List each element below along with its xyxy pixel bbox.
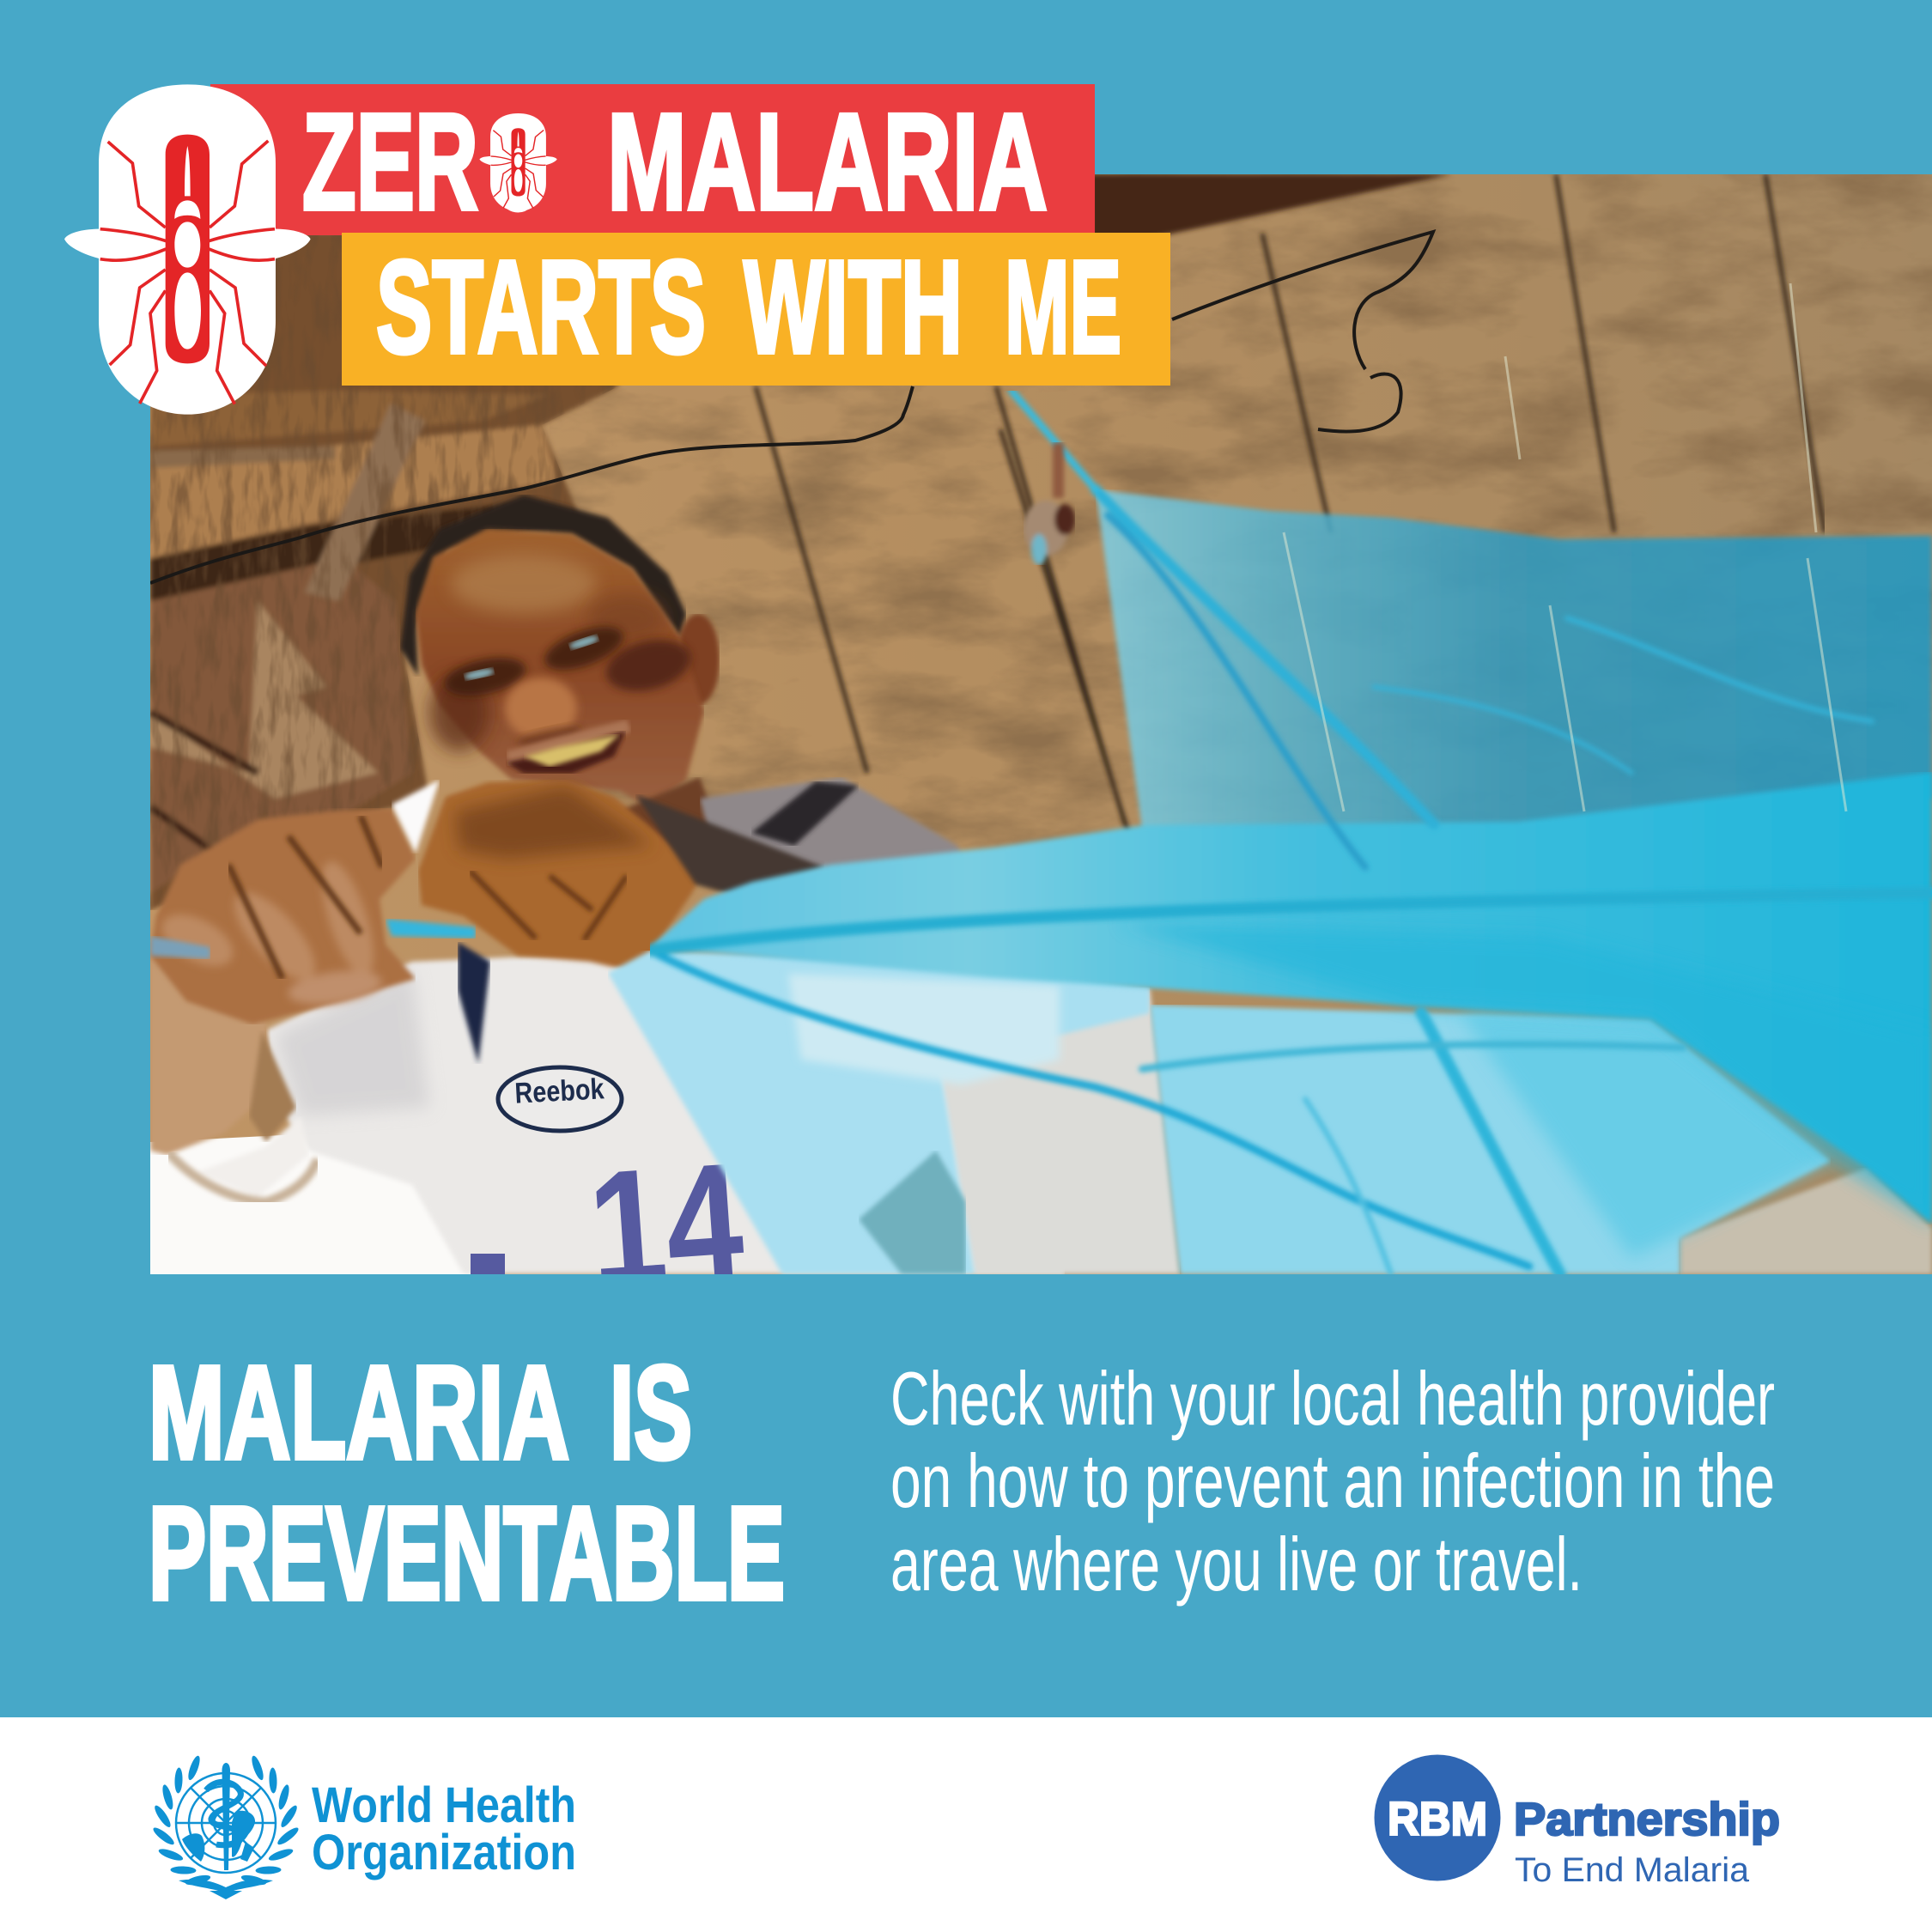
photo: lit palm leaves — [150, 601, 378, 799]
photo: background wall details — [150, 174, 1825, 910]
photo: bright sky at bottom left — [150, 1125, 481, 1274]
photo: straw texture on thatch — [150, 232, 683, 910]
photo: dark thatch shadow — [150, 502, 515, 601]
thumb — [286, 966, 384, 1009]
finger one — [154, 904, 241, 976]
emblem laurel leaves right — [240, 1754, 301, 1887]
photo: left cheek shadow — [429, 674, 489, 751]
photo: shirt reebok badge — [498, 1067, 622, 1131]
photo: eye socket left — [441, 651, 529, 702]
photo: second eye — [568, 634, 600, 651]
logo mosquito legs — [108, 141, 268, 404]
photo: thick lower hem — [650, 951, 1529, 1267]
photo: forearm shadow — [249, 1030, 296, 1142]
photo: bright gap between hands — [392, 780, 440, 854]
photo: shirt shoulder — [700, 777, 966, 884]
photo: man — [150, 495, 1065, 1274]
photo: nose — [505, 677, 577, 739]
photo: lower sheet strand — [1305, 1099, 1391, 1274]
photo: roof beam — [150, 447, 335, 468]
heading word: IS: IS — [610, 1339, 692, 1486]
photo: small shirt mark — [471, 1254, 505, 1279]
photo: cord to wall — [1012, 391, 1096, 489]
photo: nose shadow — [516, 723, 583, 750]
photo: wood grain texture — [550, 174, 1932, 887]
RBM circle — [1374, 1755, 1501, 1880]
photo: net lower fold — [1116, 923, 1932, 1224]
photo: teeth — [524, 734, 620, 767]
photo: right hand knuckle shadow — [455, 786, 653, 859]
title word: MALARIA: MALARIA — [607, 84, 1048, 239]
photo: forehead highlight — [451, 555, 597, 613]
photo: dried palm leaves — [150, 558, 412, 893]
photo: face — [416, 529, 704, 808]
photo: pale net over shirt — [608, 951, 1150, 1274]
title banner: red — [210, 84, 1095, 235]
photo: sleeve underside — [197, 1116, 309, 1198]
title block: zero malaria starts with me — [210, 84, 1170, 386]
WHO wordmark line one: World Health — [312, 1777, 576, 1833]
emblem staff — [222, 1763, 230, 1870]
photo: pale thatch band — [150, 425, 558, 558]
photo: faint strand — [1142, 1044, 1683, 1069]
photo: chalk marks on planks — [1284, 283, 1846, 811]
photo: roof post — [305, 404, 425, 601]
emblem globe rings — [176, 1773, 276, 1873]
small zero shape — [490, 113, 546, 211]
emblem ribbon — [179, 1880, 273, 1899]
photo: knot cloth — [1024, 501, 1068, 556]
photo: upper net sheet — [1096, 489, 1932, 841]
small mosquito wings — [479, 156, 557, 166]
photo: hair — [400, 495, 686, 677]
photo: dark patch under net — [859, 1151, 966, 1274]
photo: shirt number 14: 14 — [583, 1129, 749, 1321]
finger two — [222, 880, 328, 992]
title word: ME: ME — [1005, 234, 1121, 381]
photo: left hand fingers — [154, 856, 385, 1009]
title word: O: O — [490, 91, 546, 240]
title banner: yellow — [342, 233, 1170, 386]
body line three: area where you live or travel. — [890, 1522, 1583, 1607]
heading: malaria is preventable — [149, 1339, 785, 1627]
photo: mouth — [506, 731, 626, 774]
photo: grey rod under left hand — [150, 936, 210, 959]
RBM initials: RBM — [1388, 1792, 1487, 1845]
photo: strand through net — [1421, 1012, 1560, 1274]
photo: upper thatch band — [150, 391, 550, 447]
photo: upper sheet fold — [1567, 618, 1872, 721]
WHO wordmark line two: Organization — [312, 1825, 576, 1880]
photo: man hanging a blue mosquito net — [150, 174, 1932, 1321]
photo: sleeve cuff — [168, 1152, 318, 1202]
logo wings — [64, 229, 311, 260]
photo: upper net strand two — [1108, 515, 1365, 867]
photo: knot strip — [1053, 442, 1064, 498]
heading line two: PREVENTABLE — [149, 1479, 785, 1627]
photo: thatched roof at left — [150, 232, 653, 910]
emblem laurel leaves left — [151, 1754, 211, 1887]
photo: forehead shadow — [588, 594, 665, 642]
photo: sleeve seen through net — [788, 974, 1060, 1084]
photo: wires on wall — [150, 232, 1433, 583]
photo: shirt shading — [275, 970, 429, 1116]
photo: pale wall behind lower net — [902, 987, 1180, 1274]
icon: large mosquito zero logo — [64, 84, 311, 415]
photo: exposed wall bottom right — [1680, 1168, 1932, 1274]
photo: ear — [677, 614, 720, 705]
photo: upper sheet fold two — [1374, 687, 1631, 773]
logo: World Health Organization — [151, 1754, 576, 1899]
small mosquito body — [511, 128, 526, 196]
emblem continents — [182, 1811, 255, 1862]
Partnership wordmark: Partnership — [1514, 1794, 1780, 1845]
photo: knot of cloth on wall — [1024, 442, 1075, 565]
photo: left hand — [150, 808, 416, 1024]
photo: navy shirt stripe — [458, 942, 490, 1064]
photo: deeper cyan in lower sheet — [1460, 1013, 1831, 1258]
title word: ZER: ZER — [302, 84, 478, 239]
logo zero shape — [99, 84, 276, 415]
photo: net ropes and folds — [650, 391, 1932, 1274]
photo: right hand finger creases — [470, 871, 627, 940]
photo: left hand finger creases — [228, 816, 382, 979]
heading word: MALARIA: MALARIA — [149, 1339, 569, 1486]
photo: badge oval — [498, 1067, 622, 1131]
title word: STARTS: STARTS — [376, 234, 706, 381]
finger three — [311, 856, 385, 981]
photo: shirt shoulder stripe — [751, 781, 859, 846]
photo: knot blue part — [1031, 534, 1047, 565]
To End Malaria wordmark: To End Malaria — [1515, 1851, 1750, 1889]
photo: lip — [507, 720, 631, 766]
logo: RBM Partnership to End Malaria — [1374, 1755, 1780, 1889]
photo: shirt brand text: Reebok — [514, 1072, 605, 1110]
title word: WITH: WITH — [744, 234, 963, 381]
photo: wrist in shadow — [635, 794, 824, 902]
photo: dark roof above the wall — [1095, 174, 1449, 237]
logo wing outlines — [100, 229, 275, 260]
photo: wall plank seams — [756, 174, 1825, 876]
logo mosquito body — [166, 135, 210, 363]
photo: band across net — [650, 893, 1932, 951]
photo: pale net sheet at bottom — [1150, 1005, 1831, 1274]
photo: dark palm line — [150, 713, 258, 859]
photo: neck — [618, 777, 730, 884]
photo: blue rod between hands — [386, 919, 476, 939]
photo: eyes — [463, 666, 495, 682]
photo: right hand — [418, 780, 704, 973]
photo: forearm — [150, 945, 270, 1155]
photo: shirt body — [266, 953, 1065, 1274]
photo: bright net mass — [650, 772, 1932, 1224]
photo: wooden wall — [150, 174, 1932, 1274]
WHO emblem — [151, 1754, 301, 1899]
body text: prevention advice — [890, 1356, 1775, 1607]
footer band — [0, 1717, 1932, 1932]
photo: right cheek shadow — [601, 632, 696, 699]
small mosquito legs — [491, 130, 546, 209]
emblem serpent — [206, 1782, 240, 1845]
photo: knot dark part — [1054, 504, 1075, 535]
photo: upper net strand — [1096, 489, 1434, 824]
photo: eye socket right — [539, 618, 629, 678]
icon: small mosquito zero — [479, 113, 557, 211]
